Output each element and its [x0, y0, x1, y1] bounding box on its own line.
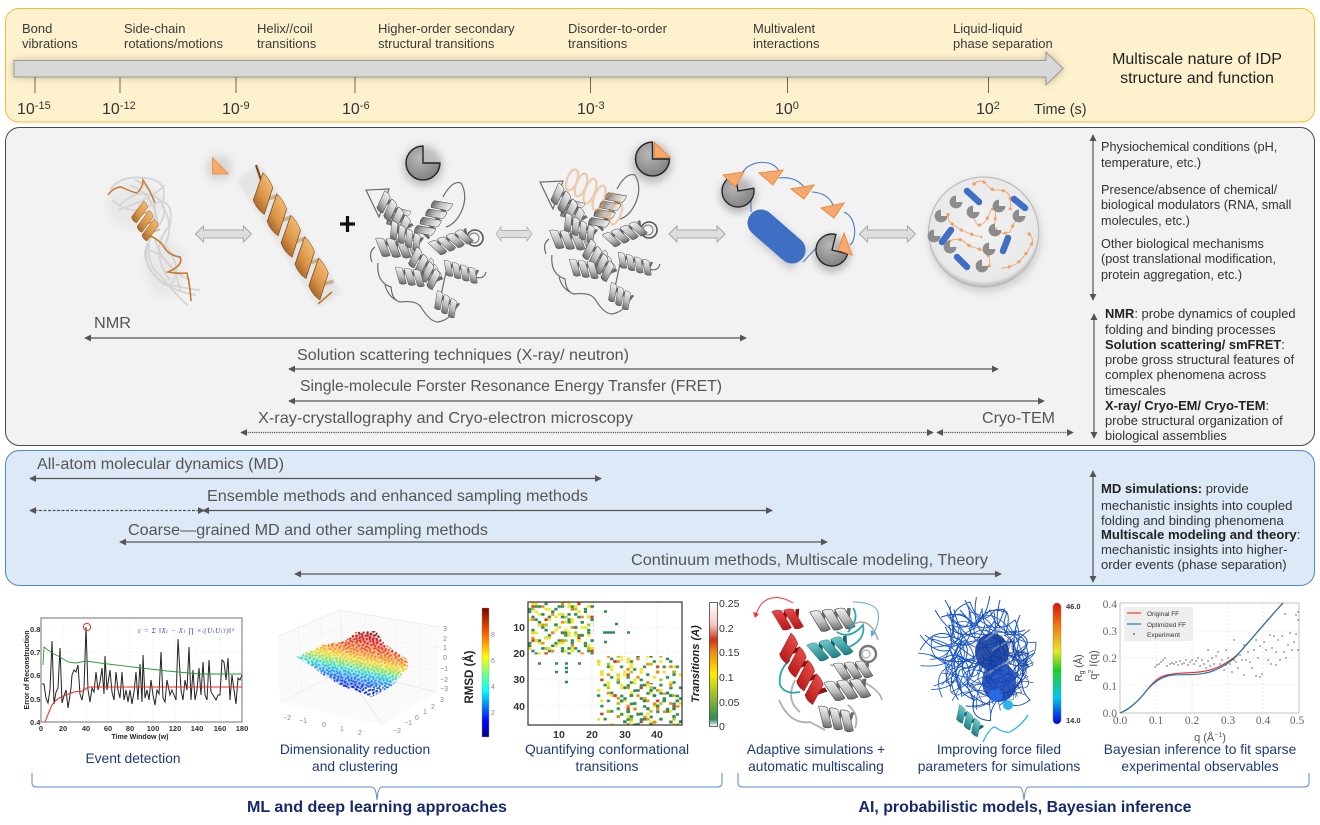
protein ensemble: force field — [905, 581, 1052, 742]
chart: event detection: 60 — [104, 724, 112, 733]
chart: Bayesian fit: Original FF — [1147, 611, 1179, 618]
caption: Bayesian inference — [1104, 742, 1297, 774]
double arrow — [860, 226, 916, 242]
caption: adaptive simulations: Adaptive simulations + — [747, 742, 885, 757]
chart: 3D scatter: 1 — [443, 645, 447, 652]
event labels: Multivalent — [753, 21, 816, 36]
chart: transition heatmap: 40 — [651, 729, 663, 741]
chart: transition heatmap: 20 — [513, 648, 525, 660]
event labels: rotations/motions — [124, 36, 223, 51]
all-atom MD range: All-atom molecular dynamics (MD) — [37, 456, 284, 473]
phase separated droplet — [928, 177, 1041, 292]
FRET range: Single-molecule Forster Resonance Energy Transfer (FRET) — [300, 378, 722, 395]
time scale values: -15 — [35, 100, 51, 112]
vertical arrow: techniques — [1093, 314, 1095, 438]
chart: 3D scatter — [277, 610, 448, 737]
chart: Bayesian fit: 0.0 — [1103, 708, 1117, 720]
chart: event detection: Time Window (w) — [112, 734, 168, 741]
caption: event detection: Event detection — [85, 751, 181, 766]
colorbar: transitions: 0.25 — [719, 598, 740, 610]
chart: transition heatmap: 30 — [619, 729, 631, 741]
caption: adaptive simulations — [747, 742, 885, 774]
techniques text: complex phenomena across — [1105, 367, 1266, 382]
chart: event detection: 0.5 — [30, 695, 40, 704]
ensemble methods range: Ensemble methods and enhanced sampling methods — [207, 488, 588, 505]
chart: Bayesian fit: 0.5 — [1290, 715, 1304, 727]
caption: force field: parameters for simulations — [918, 759, 1080, 774]
double arrow — [196, 226, 252, 242]
colorbar: transitions: 0.15 — [719, 647, 740, 659]
conditions text: temperature, etc.) — [1101, 156, 1201, 170]
chart: Bayesian fit: −1 — [1214, 732, 1222, 739]
chart: event detection: 0 — [39, 724, 43, 733]
bracket: ML — [32, 773, 722, 800]
chart: event detection: 40 — [82, 724, 90, 733]
techniques text: biological assemblies — [1105, 428, 1227, 443]
double arrow — [669, 226, 725, 242]
chart: Bayesian fit: Experiment — [1147, 632, 1180, 639]
time scale values: 0 — [793, 100, 799, 112]
chart: 3D scatter: 0 — [322, 722, 326, 729]
event labels: transitions — [568, 36, 628, 51]
time scale values: 10 — [17, 101, 35, 118]
colorbar: Rg — [1053, 602, 1086, 725]
coarse-grained range: Coarse—grained MD and other sampling methods — [128, 522, 488, 539]
colorbar: Rg: g — [1079, 670, 1086, 674]
solution scattering range: Solution scattering techniques (X-ray/ neutron) — [297, 347, 629, 364]
panel: timescale — [6, 8, 1314, 122]
bound complex protein — [540, 168, 660, 314]
event labels: Higher-order secondary — [378, 21, 515, 36]
conditions text: protein aggregation, etc.) — [1101, 268, 1242, 282]
chart: Bayesian fit — [1088, 599, 1304, 744]
chart: Bayesian fit: 2 — [1088, 670, 1095, 674]
event labels: Bond — [22, 21, 52, 36]
simulations text: folding and binding phenomena — [1101, 513, 1284, 528]
time scale values: 10 — [342, 101, 360, 118]
panel: computational methods — [6, 450, 1314, 586]
continuum methods range: Continuum methods, Multiscale modeling, Theory — [631, 552, 988, 569]
chart: 3D scatter: 3 — [443, 626, 447, 633]
simulations text — [1101, 481, 1300, 572]
bracket: AI — [738, 773, 1309, 800]
chart: 3D scatter: −2 — [393, 728, 401, 735]
colorbar: transitions: 0 — [719, 721, 725, 733]
grey protein — [366, 183, 486, 322]
chart: transition heatmap: 40 — [513, 701, 525, 713]
chart: event detection: ε = Σ ‖Xt − Xt ∏ ×i(UiUiT)‖² — [138, 627, 235, 635]
event labels: transitions — [257, 36, 317, 51]
chart: event detection: 100 — [147, 724, 159, 733]
colorbar: transitions — [690, 598, 740, 733]
event labels: Helix//coil — [257, 21, 313, 36]
event labels: Liquid-liquid — [953, 21, 1022, 36]
chart: transition heatmap: 30 — [513, 674, 525, 686]
colorbar: RMSD: RMSD (Å) — [463, 650, 476, 704]
colorbar: RMSD — [463, 608, 495, 737]
time scale values: -3 — [595, 100, 605, 112]
chart: Bayesian fit: 0.1 — [1149, 715, 1163, 727]
techniques text: probe gross structural features of — [1105, 352, 1295, 367]
simulations text: mechanistic insights into coupled — [1101, 498, 1292, 513]
colorbar: transitions: Transitions (A) — [690, 625, 702, 703]
chart: event detection: Error of Reconstruction — [24, 631, 31, 709]
caption: force field — [918, 742, 1080, 774]
conditions text: molecules, etc.) — [1101, 214, 1190, 228]
simulations text: MD simulations: provide — [1101, 481, 1249, 496]
colorbar: RMSD: 4 — [491, 684, 495, 691]
time scale values: 10 — [775, 101, 793, 118]
chart: Bayesian fit: 0.2 — [1103, 653, 1117, 665]
crystallography and cryo-EM range: X-ray-crystallography and Cryo-electron microscopy — [258, 410, 633, 427]
chart: event detection: 160 — [214, 724, 226, 733]
disordered IDP ensemble — [107, 178, 200, 305]
event labels: Disorder-to-order — [568, 21, 668, 36]
chart: 3D scatter: 0 — [443, 655, 447, 662]
time scale values: 2 — [994, 100, 1000, 112]
chart: 3D scatter: 3 — [440, 697, 444, 704]
chart: event detection: 180 — [236, 724, 248, 733]
chart: event detection: 80 — [126, 724, 134, 733]
caption: force field: Improving force filed — [937, 742, 1061, 757]
caption: conformational transitions — [525, 742, 689, 774]
caption: Bayesian inference: experimental observables — [1121, 759, 1279, 774]
chart: 3D scatter: 0 — [415, 715, 419, 722]
chart: Bayesian fit: Optimized FF — [1147, 622, 1186, 629]
conditions text: Physiochemical conditions (pH, — [1101, 140, 1277, 154]
time scale values: Time (s) — [1034, 102, 1087, 118]
chart: event detection: 20 — [59, 724, 67, 733]
timeline title: Multiscale nature of IDP — [1112, 51, 1282, 68]
cryo-TEM range: Cryo-TEM — [982, 410, 1055, 427]
time ticks — [35, 77, 988, 93]
techniques text: Solution scattering/ smFRET: — [1105, 337, 1285, 352]
chart: event detection: 0.4 — [30, 718, 41, 727]
chart: 3D scatter: −2 — [440, 677, 448, 684]
vertical arrow: conditions — [1092, 135, 1094, 300]
chart: transition heatmap: 10 — [513, 622, 525, 634]
chart: event detection: 0.6 — [30, 671, 40, 680]
chart: Bayesian fit: q (Å — [1194, 732, 1214, 744]
chart: transition heatmap: 20 — [586, 729, 598, 741]
timeline title — [1112, 51, 1282, 87]
techniques text: X-ray/ Cryo-EM/ Cryo-TEM: — [1105, 398, 1269, 413]
caption: conformational transitions: transitions — [576, 759, 639, 774]
conditions text: biological modulators (RNA, small — [1101, 198, 1291, 212]
icon: small orange triangle — [206, 155, 232, 181]
time arrow — [14, 52, 1063, 86]
chart: Bayesian fit: I(q) — [1088, 650, 1100, 670]
caption: dimensionality reduction — [280, 742, 430, 774]
chart: event detection: 0.8 — [30, 625, 40, 634]
protein: adaptive simulations — [753, 598, 882, 733]
chart: Bayesian fit: 0.3 — [1103, 626, 1117, 638]
caption: dimensionality reduction: Dimensionality reduction — [280, 742, 430, 757]
time scale values: -12 — [120, 100, 136, 112]
chart: Bayesian fit: 0.4 — [1103, 599, 1117, 611]
chart: Bayesian fit: ) — [1222, 732, 1226, 744]
colorbar: RMSD: 6 — [491, 658, 495, 665]
chart: 3D scatter: 1 — [423, 709, 427, 716]
chart: Bayesian fit: 0.2 — [1185, 715, 1199, 727]
techniques text: timescales — [1105, 383, 1166, 398]
multivalent complex — [719, 162, 855, 272]
time scale values: -6 — [360, 100, 370, 112]
chart: transition heatmap — [513, 602, 682, 741]
colorbar: Rg: R — [1074, 674, 1085, 682]
double arrow — [496, 227, 532, 241]
colorbar: Rg: 14.0 — [1066, 716, 1081, 725]
techniques text — [1105, 306, 1296, 443]
time scale values — [17, 100, 1087, 118]
chart: 3D scatter: −2 — [283, 715, 291, 722]
chart: 3D scatter: −1 — [404, 720, 412, 727]
chart: 3D scatter: 2 — [431, 704, 435, 711]
cryo-TEM range — [937, 410, 1073, 432]
colorbar: Rg: 46.0 — [1066, 602, 1081, 611]
chart: event detection: 140 — [191, 724, 203, 733]
event labels: Side-chain — [124, 21, 185, 36]
panel: experimental techniques — [6, 128, 1314, 446]
chart: 3D scatter: 2 — [358, 730, 362, 737]
icon: grey partner pacman — [403, 146, 443, 186]
orange helix — [243, 165, 339, 304]
time scale values: 10 — [222, 101, 240, 118]
chart: Bayesian fit: 0.0 — [1113, 715, 1127, 727]
simulations text: mechanistic insights into higher- — [1101, 542, 1287, 557]
chart: 3D scatter: −1 — [440, 666, 448, 673]
simulations text: order events (phase separation) — [1101, 557, 1287, 572]
heading: AI and Bayesian: AI, probabilistic models, Bayesian inference — [858, 799, 1192, 816]
techniques text: probe structural organization of — [1105, 413, 1283, 428]
plus sign — [340, 216, 355, 232]
conditions text: Other biological mechanisms — [1101, 237, 1264, 251]
NMR range: NMR — [94, 315, 131, 332]
chart: 3D scatter: −1 — [299, 718, 307, 725]
chart: Bayesian fit: 0.3 — [1221, 715, 1235, 727]
chart: Bayesian fit: q — [1088, 674, 1100, 680]
simulations text: Multiscale modeling and theory: — [1101, 527, 1300, 542]
chart: Bayesian fit: 0.4 — [1256, 715, 1270, 727]
caption: conformational transitions: Quantifying conformational — [525, 742, 689, 757]
techniques text: NMR: probe dynamics of coupled — [1105, 306, 1296, 321]
event labels: vibrations — [22, 36, 78, 51]
event labels: interactions — [753, 36, 820, 51]
event labels: phase separation — [953, 36, 1053, 51]
conditions text: Presence/absence of chemical/ — [1101, 183, 1278, 197]
colorbar: transitions: 0.05 — [719, 697, 740, 709]
time scale values: 10 — [976, 101, 994, 118]
chart: event detection — [24, 618, 248, 741]
caption: adaptive simulations: automatic multiscaling — [748, 759, 884, 774]
time scale values: 10 — [577, 101, 595, 118]
conditions text — [1101, 140, 1291, 282]
colorbar: transitions: 0.2 — [719, 623, 734, 635]
caption: Bayesian inference: Bayesian inference to fit sparse — [1104, 742, 1297, 757]
chart: event detection: 120 — [169, 724, 181, 733]
chart: transition heatmap: 10 — [553, 729, 565, 741]
chart: Bayesian fit: 0.1 — [1103, 681, 1117, 693]
event labels — [22, 21, 1053, 51]
heading: ML and deep learning: ML and deep learning approaches — [247, 799, 507, 816]
techniques text: folding and binding processes — [1105, 322, 1276, 337]
time scale values: -9 — [240, 100, 250, 112]
colorbar: Rg: (Å) — [1072, 654, 1085, 670]
colorbar: RMSD: 2 — [491, 710, 495, 717]
chart: 3D scatter: −3 — [440, 686, 448, 693]
time scale values: 10 — [102, 101, 120, 118]
chart: 3D scatter: 1 — [340, 726, 344, 733]
timeline title: structure and function — [1120, 70, 1274, 87]
colorbar: transitions: 0.1 — [719, 672, 734, 684]
chart: 3D scatter: 2 — [443, 636, 447, 643]
event labels: structural transitions — [378, 36, 495, 51]
vertical arrow: simulations — [1092, 471, 1094, 582]
chart: event detection: 0.7 — [30, 648, 40, 657]
caption: dimensionality reduction: and clustering — [312, 759, 398, 774]
conditions text: (post translational modification, — [1101, 252, 1276, 266]
colorbar: RMSD: 8 — [491, 632, 495, 639]
icon: pacman with bound triangle — [632, 142, 672, 183]
